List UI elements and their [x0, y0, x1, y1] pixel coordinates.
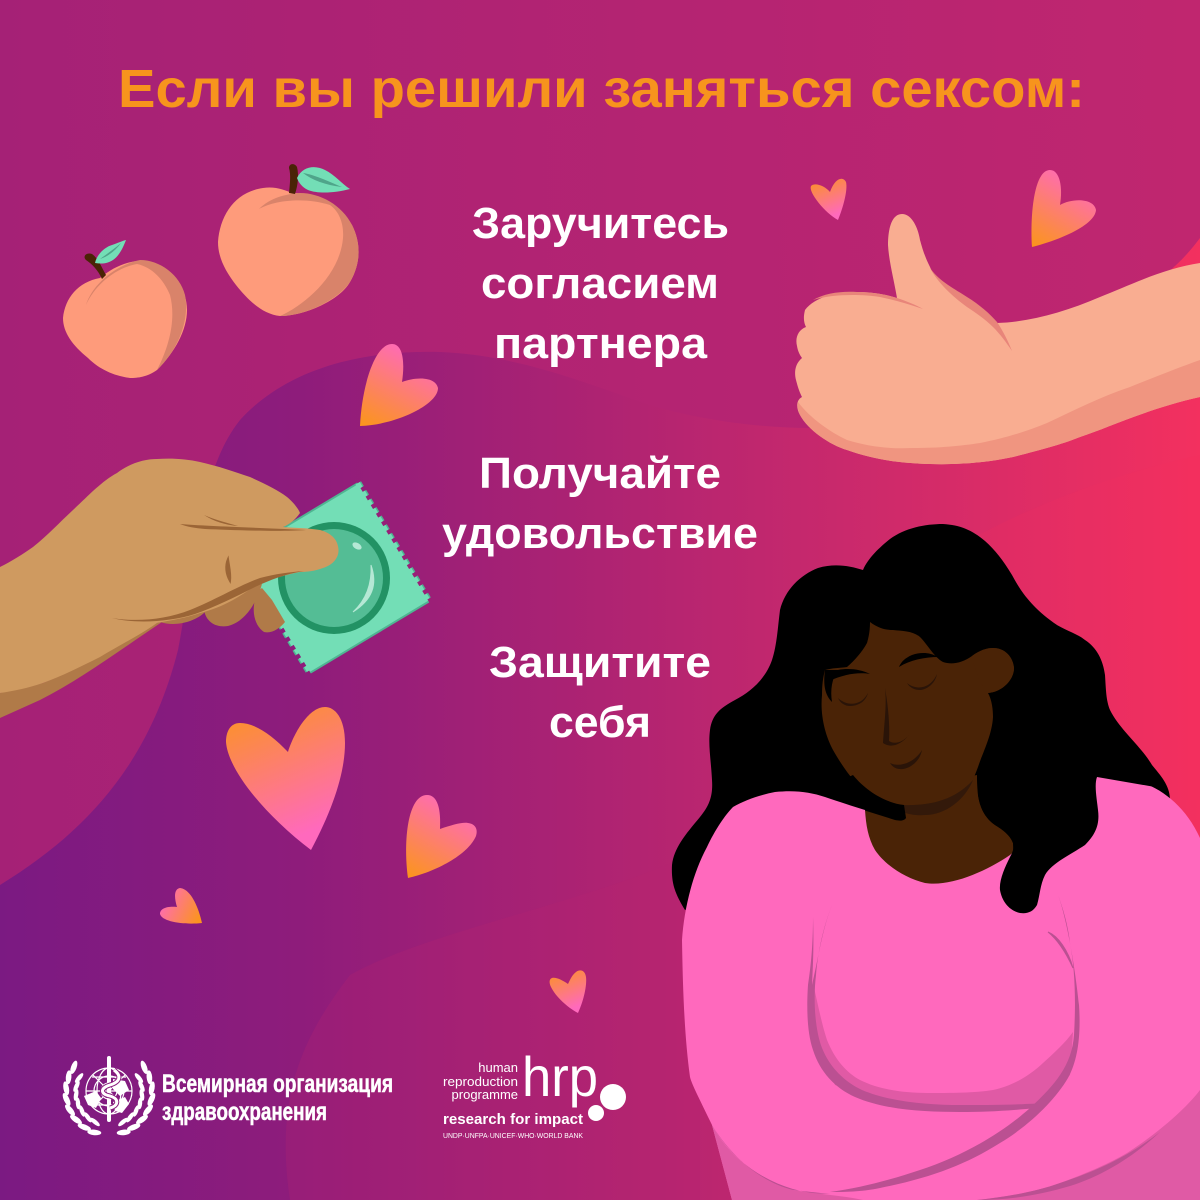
icon: medium heart — [406, 795, 477, 878]
continents — [84, 1091, 101, 1108]
icon: tiny heart left — [160, 888, 202, 924]
logo: WHO emblem — [61, 1056, 157, 1136]
logo: HRP: programme — [452, 1087, 518, 1102]
icon: small peach — [63, 240, 187, 378]
logo: HRP — [443, 1045, 626, 1140]
icon: small heart near thumb — [811, 179, 846, 220]
globe — [86, 1068, 132, 1114]
lower body shadow — [712, 1090, 1200, 1200]
illustration: thumbs up hand — [795, 214, 1200, 464]
arm outline left and bottom — [807, 905, 1043, 1112]
breast crease — [1048, 932, 1073, 968]
illustration: hand holding condom — [0, 459, 429, 718]
text block: pleasure: удовольствие — [442, 509, 758, 558]
text block: consent: согласием — [481, 259, 719, 308]
text block: protection — [489, 638, 711, 747]
face — [822, 622, 1014, 805]
text block: protection: Защитите — [489, 638, 711, 687]
text block: pleasure: Получайте — [479, 449, 721, 498]
facial features — [838, 674, 937, 769]
text block: pleasure — [442, 449, 758, 558]
icon: large peach — [218, 164, 359, 316]
neck — [860, 775, 1015, 900]
text block: consent: партнера — [494, 319, 708, 368]
fingers behind packet — [158, 584, 285, 632]
hair lock over shirt — [978, 690, 1155, 913]
right lower body outline — [977, 1132, 1160, 1200]
logo: HRP: human — [478, 1060, 518, 1075]
logo: HRP: hrp — [522, 1045, 598, 1108]
illustration: woman — [672, 524, 1200, 1200]
logo text: WHO: Всемирная организация — [162, 1070, 393, 1098]
staff and serpent — [107, 1056, 111, 1122]
logo text: WHO: здравоохранения — [162, 1098, 327, 1126]
ear and forehead over hair — [972, 648, 1014, 693]
icon: tiny heart bottom — [550, 970, 586, 1013]
text block: protection: себя — [549, 698, 651, 747]
condom packet — [239, 483, 429, 673]
icon: heart top right — [1032, 170, 1096, 247]
title: Если вы решили заняться сексом: — [118, 59, 1085, 119]
hair strand under chin — [820, 775, 906, 821]
logo text: WHO — [162, 1070, 393, 1126]
laurel left — [61, 1060, 102, 1136]
logo: HRP: UNDP·UNFPA·UNICEF·WHO·WORLD BANK — [443, 1133, 583, 1140]
icon: large heart — [226, 707, 345, 850]
icon: heart by peach — [360, 344, 438, 426]
logo: HRP: reproduction — [443, 1074, 518, 1089]
lower arm outline — [712, 1125, 830, 1194]
logo: HRP: research for impact — [443, 1111, 583, 1128]
chin shadow — [857, 780, 973, 815]
text block: consent: Заручитесь — [472, 199, 729, 248]
laurel right — [116, 1060, 157, 1136]
text block: consent — [472, 199, 729, 368]
finger creases — [112, 515, 306, 621]
arm outline right — [830, 892, 1080, 1192]
hair back — [672, 524, 1170, 913]
arm fold shading — [813, 983, 1073, 1108]
shirt — [682, 777, 1200, 1200]
eyebrows — [824, 653, 938, 702]
